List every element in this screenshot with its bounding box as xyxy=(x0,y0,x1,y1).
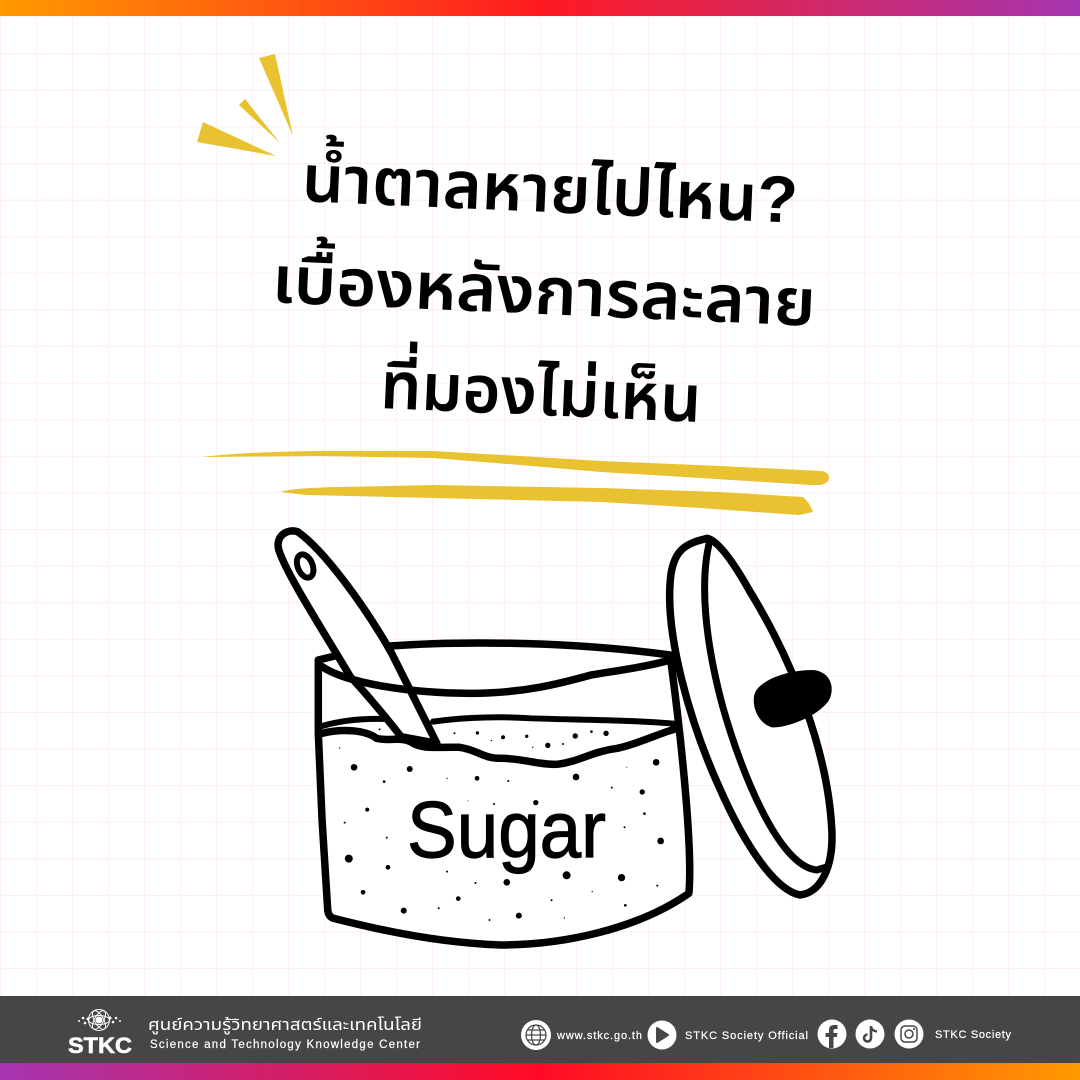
organisation name: Science and Technology Knowledge Center xyxy=(150,1039,420,1051)
instagram text: STKC Society xyxy=(935,1029,1012,1041)
logo wordmark: STKC xyxy=(68,1033,132,1058)
icon: instagram xyxy=(894,1020,924,1048)
icon: facebook xyxy=(818,1020,846,1048)
spoon xyxy=(278,531,437,743)
lid knob xyxy=(754,670,832,727)
title: น้ำตาลหายไปไหน? xyxy=(301,133,800,237)
website text: www.stkc.go.th xyxy=(556,1030,642,1042)
bottom gradient bar xyxy=(0,1063,1080,1080)
sugar speckles xyxy=(339,728,664,921)
icon: yellow burst accent xyxy=(197,54,293,156)
sugar surface front line xyxy=(322,728,678,764)
jar label: Sugar: Sugar xyxy=(407,785,606,874)
organisation name xyxy=(148,1017,422,1051)
organisation name: ศูนย์ความรู้วิทยาศาสตร์และเทคโนโลยี xyxy=(148,1017,422,1034)
title: เบื้องหลังการละลาย xyxy=(271,234,818,340)
icon: tiktok xyxy=(856,1020,884,1048)
sugar surface back line xyxy=(322,717,678,726)
logo atom mark xyxy=(78,1009,121,1031)
lid xyxy=(670,538,832,895)
youtube text: STKC Society Official xyxy=(685,1030,808,1042)
jar front rim xyxy=(322,660,670,693)
illustration: sugar jar with spoon and lid xyxy=(278,531,832,945)
logo: STKC xyxy=(68,1009,132,1058)
social links xyxy=(521,1020,1012,1050)
jar body xyxy=(318,643,690,945)
lid inner line xyxy=(705,542,828,870)
title: ที่มองไม่เห็น xyxy=(379,340,703,436)
yellow brush underlines xyxy=(203,451,829,515)
icon: globe xyxy=(521,1020,551,1050)
spoon hole xyxy=(294,553,316,579)
footer band xyxy=(0,996,1080,1063)
title xyxy=(271,133,818,436)
icon: play xyxy=(648,1020,676,1050)
top gradient bar xyxy=(0,0,1080,16)
